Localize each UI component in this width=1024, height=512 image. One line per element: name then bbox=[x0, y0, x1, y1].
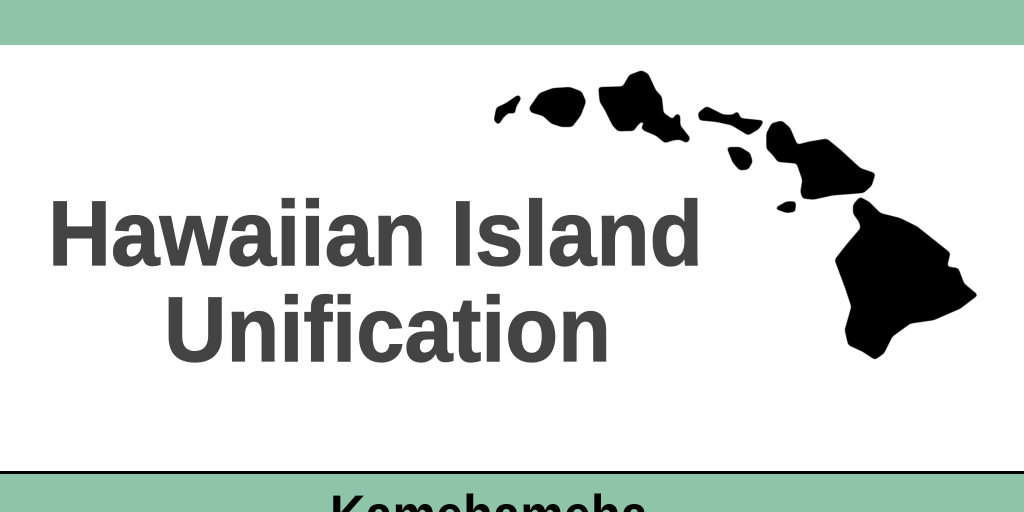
island: Kahoolawe bbox=[776, 202, 795, 212]
band divider line bbox=[0, 471, 1024, 474]
island: Maui bbox=[767, 122, 874, 199]
title bbox=[48, 183, 703, 381]
island: Hawaii bbox=[836, 198, 977, 359]
title: Hawaiian Island bbox=[48, 183, 703, 285]
island: Niihau bbox=[495, 96, 520, 123]
island: Lanai bbox=[728, 148, 752, 169]
island: Oahu bbox=[599, 71, 689, 142]
title: Unification bbox=[164, 279, 611, 381]
island: Kauai bbox=[530, 88, 585, 126]
bottom green band bbox=[0, 473, 1024, 512]
top green band bbox=[0, 0, 1024, 45]
island: Molokai bbox=[699, 107, 763, 134]
icon: map of the Hawaiian islands bbox=[495, 71, 977, 359]
